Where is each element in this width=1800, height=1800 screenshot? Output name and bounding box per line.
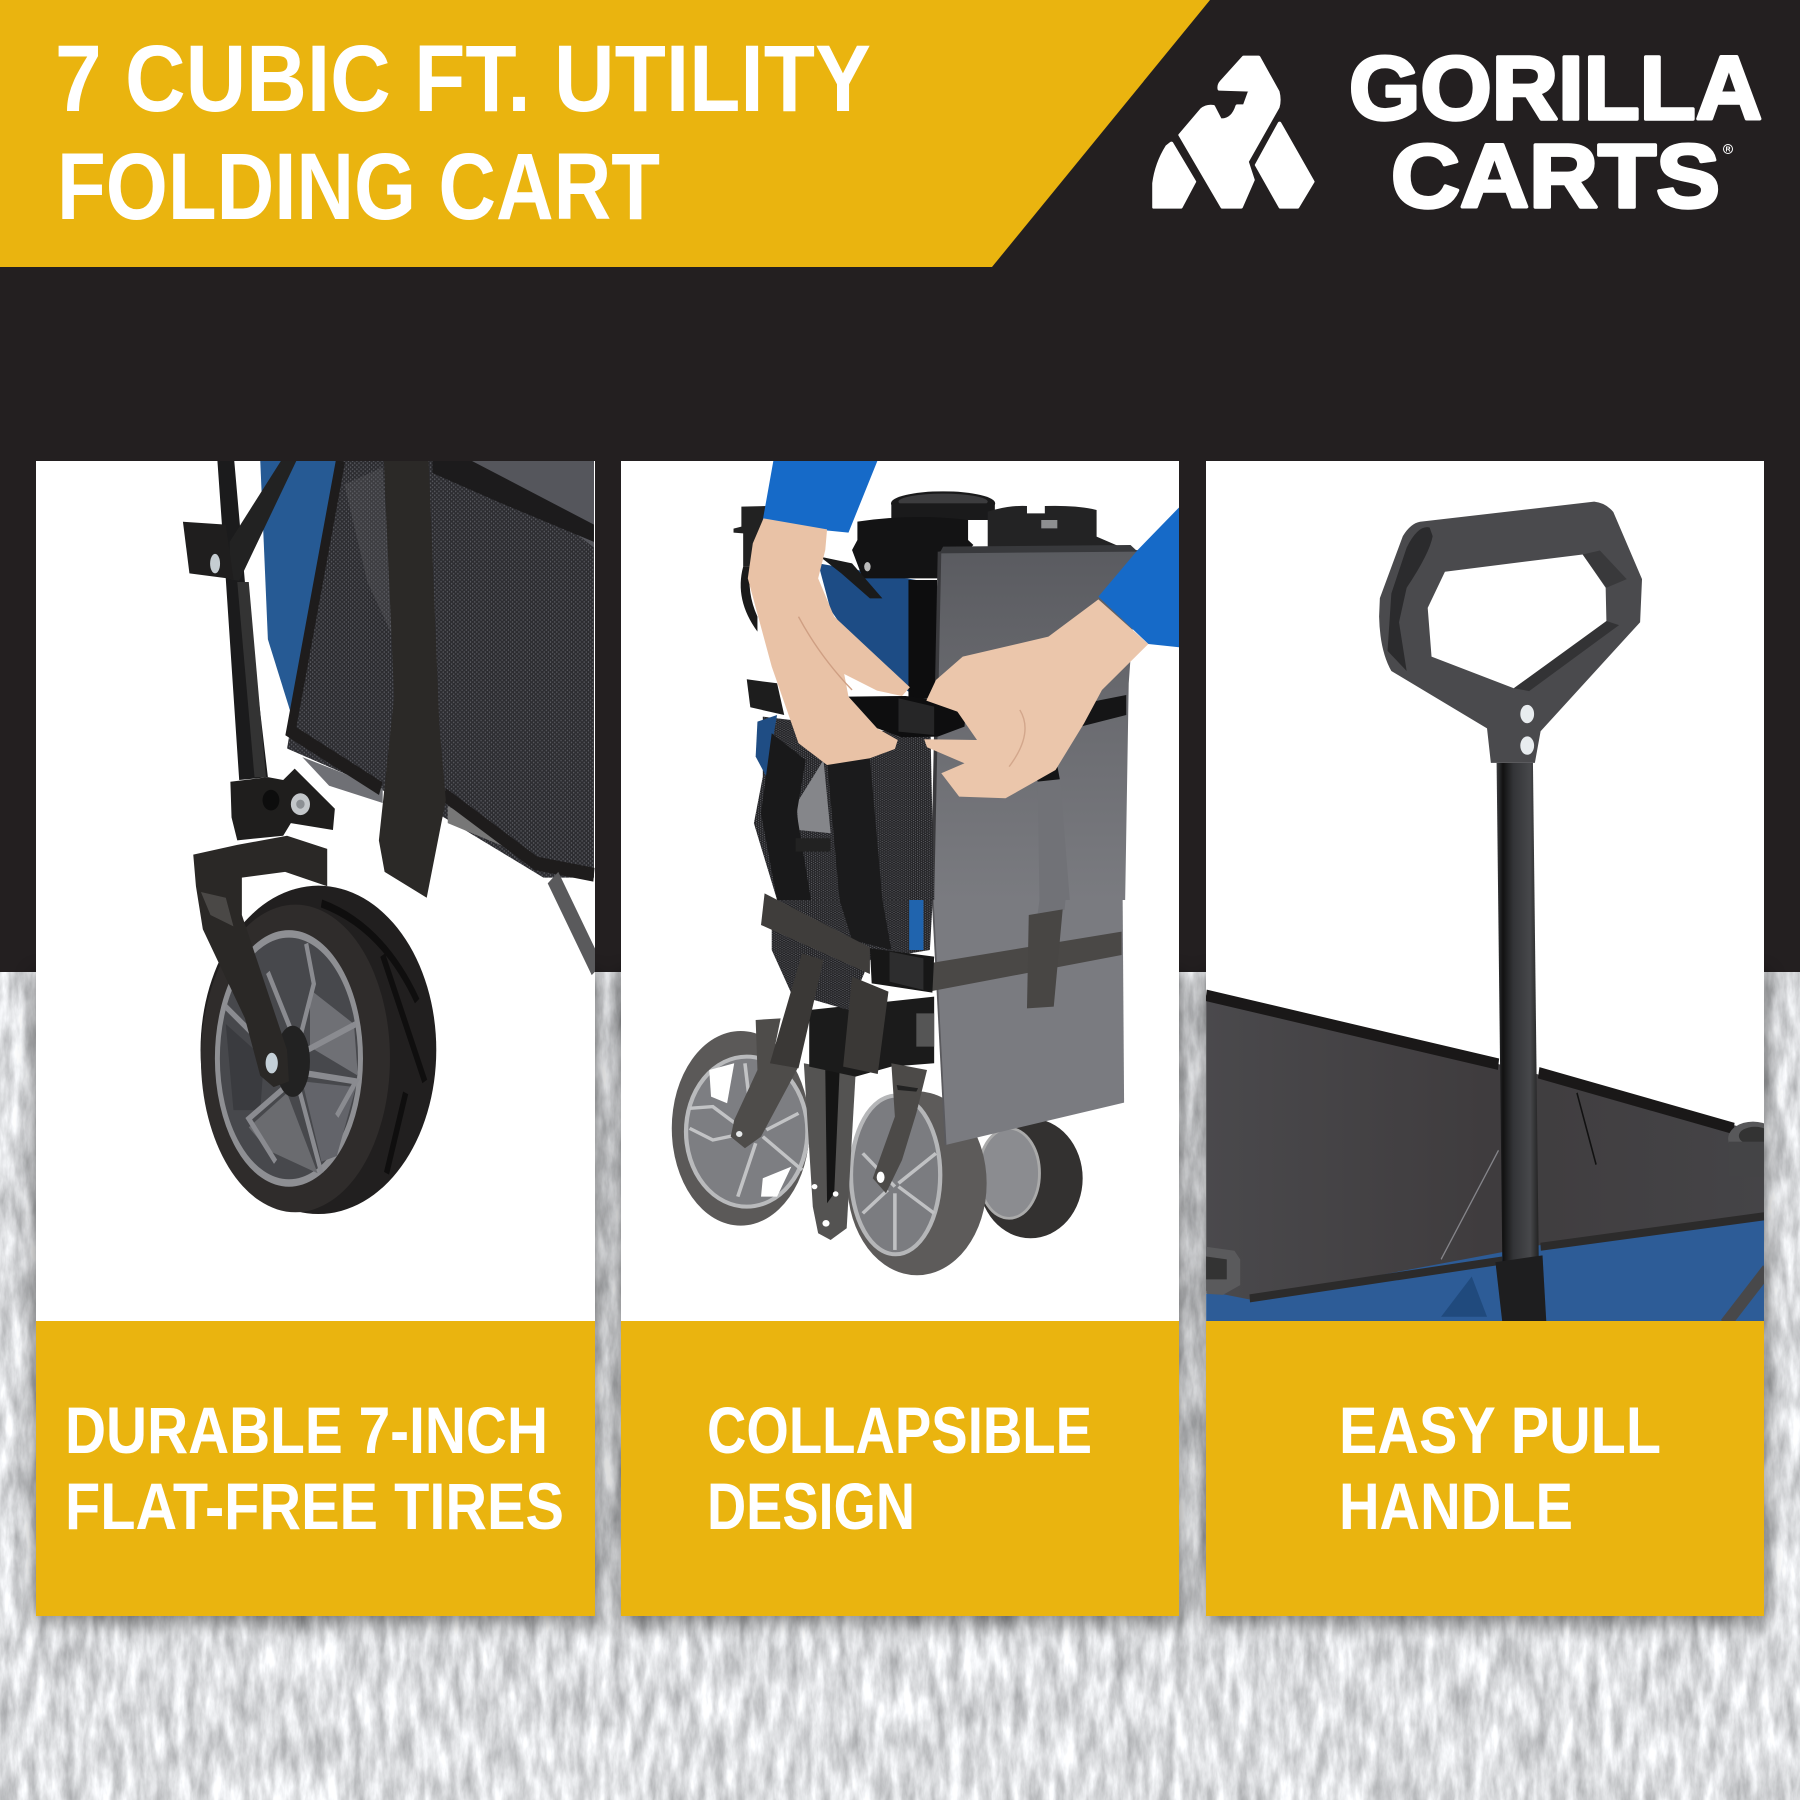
left fork <box>731 1018 798 1148</box>
icon: gorilla mark <box>1154 57 1313 207</box>
right sleeve <box>1098 507 1180 647</box>
front cup holder <box>852 517 973 578</box>
photo: folded cart and hands <box>621 460 1180 1321</box>
caption box <box>621 1321 1179 1616</box>
pole base <box>1495 1255 1546 1322</box>
left hand <box>748 518 910 765</box>
left sleeve <box>762 460 878 533</box>
wordmark: CARTS <box>1391 127 1720 227</box>
caption text: HANDLE <box>1339 1469 1573 1543</box>
title <box>55 26 871 240</box>
caption text: FLAT-FREE TIRES <box>65 1469 564 1543</box>
tube and bracket <box>240 461 296 571</box>
lower buckle <box>870 948 934 993</box>
photo: handle close-up <box>1206 461 1778 1325</box>
collar <box>230 769 335 840</box>
concrete texture background <box>0 972 1800 1800</box>
central folding tubes <box>804 1063 856 1240</box>
lower right tube <box>1724 1271 1766 1325</box>
strap <box>379 460 446 898</box>
title: FOLDING CART <box>57 134 660 240</box>
right cup holder <box>988 506 1120 547</box>
caption text: COLLAPSIBLE <box>707 1393 1092 1467</box>
frame pole <box>217 460 268 780</box>
undercarriage <box>809 997 934 1077</box>
fabric binding <box>1206 995 1734 1128</box>
front wheel <box>847 1091 987 1275</box>
panel: flat-free tires <box>36 460 597 1616</box>
panel shadows <box>32 972 1768 1624</box>
cart interior fabric <box>1206 995 1764 1300</box>
left wheel <box>672 1031 810 1226</box>
buckle <box>848 696 966 737</box>
wordmark <box>1349 39 1762 227</box>
brand logo <box>1154 39 1762 227</box>
back cup holder <box>891 491 996 505</box>
panel: easy pull handle <box>1206 461 1778 1616</box>
lower mesh <box>772 900 933 1010</box>
registered mark <box>1724 144 1732 154</box>
mesh pocket <box>754 717 934 900</box>
left cup holder <box>734 506 766 567</box>
lower strap <box>761 893 870 974</box>
panel: collapsible design <box>621 460 1180 1616</box>
wordmark: GORILLA <box>1349 39 1762 139</box>
lower frame tube <box>553 878 597 969</box>
handle grip <box>1379 502 1642 763</box>
caption box <box>1206 1321 1764 1616</box>
registered mark: R <box>1726 146 1731 154</box>
strap right <box>1081 695 1126 727</box>
caption text: DURABLE 7-INCH <box>65 1393 548 1467</box>
header banner <box>0 0 1210 267</box>
caption text <box>1339 1393 1661 1543</box>
dark background <box>0 0 1800 972</box>
caption text <box>707 1393 1092 1543</box>
right fork <box>873 1063 927 1193</box>
lower gray panel <box>933 900 1124 1145</box>
photo: wheel close-up <box>36 460 597 1321</box>
handle bolts <box>1520 705 1534 723</box>
blue fabric <box>260 460 337 726</box>
grip shading <box>1583 550 1627 588</box>
left cup holder <box>1206 1247 1240 1295</box>
caption box <box>36 1321 595 1616</box>
webbing straps <box>761 733 811 900</box>
tire <box>201 886 436 1214</box>
right cup holder <box>1728 1122 1778 1176</box>
hanging straps <box>770 953 823 1068</box>
caption text <box>65 1393 564 1543</box>
strap left end <box>747 679 784 715</box>
rear wheel <box>978 1118 1083 1238</box>
right hand <box>924 599 1148 798</box>
pole <box>1497 763 1539 1264</box>
blue fabric <box>1206 1208 1764 1322</box>
gray folded panel <box>932 550 1138 900</box>
blue fabric <box>818 563 916 693</box>
caption text: EASY PULL <box>1339 1393 1661 1467</box>
rim <box>217 934 361 1183</box>
title: 7 CUBIC FT. UTILITY <box>55 26 871 132</box>
caption text: DESIGN <box>707 1469 915 1543</box>
fork <box>193 836 327 1087</box>
mesh pocket <box>287 460 594 878</box>
fabric creases <box>1441 1150 1499 1259</box>
handle sleeve on panel <box>1038 775 1070 900</box>
pole <box>908 580 937 698</box>
